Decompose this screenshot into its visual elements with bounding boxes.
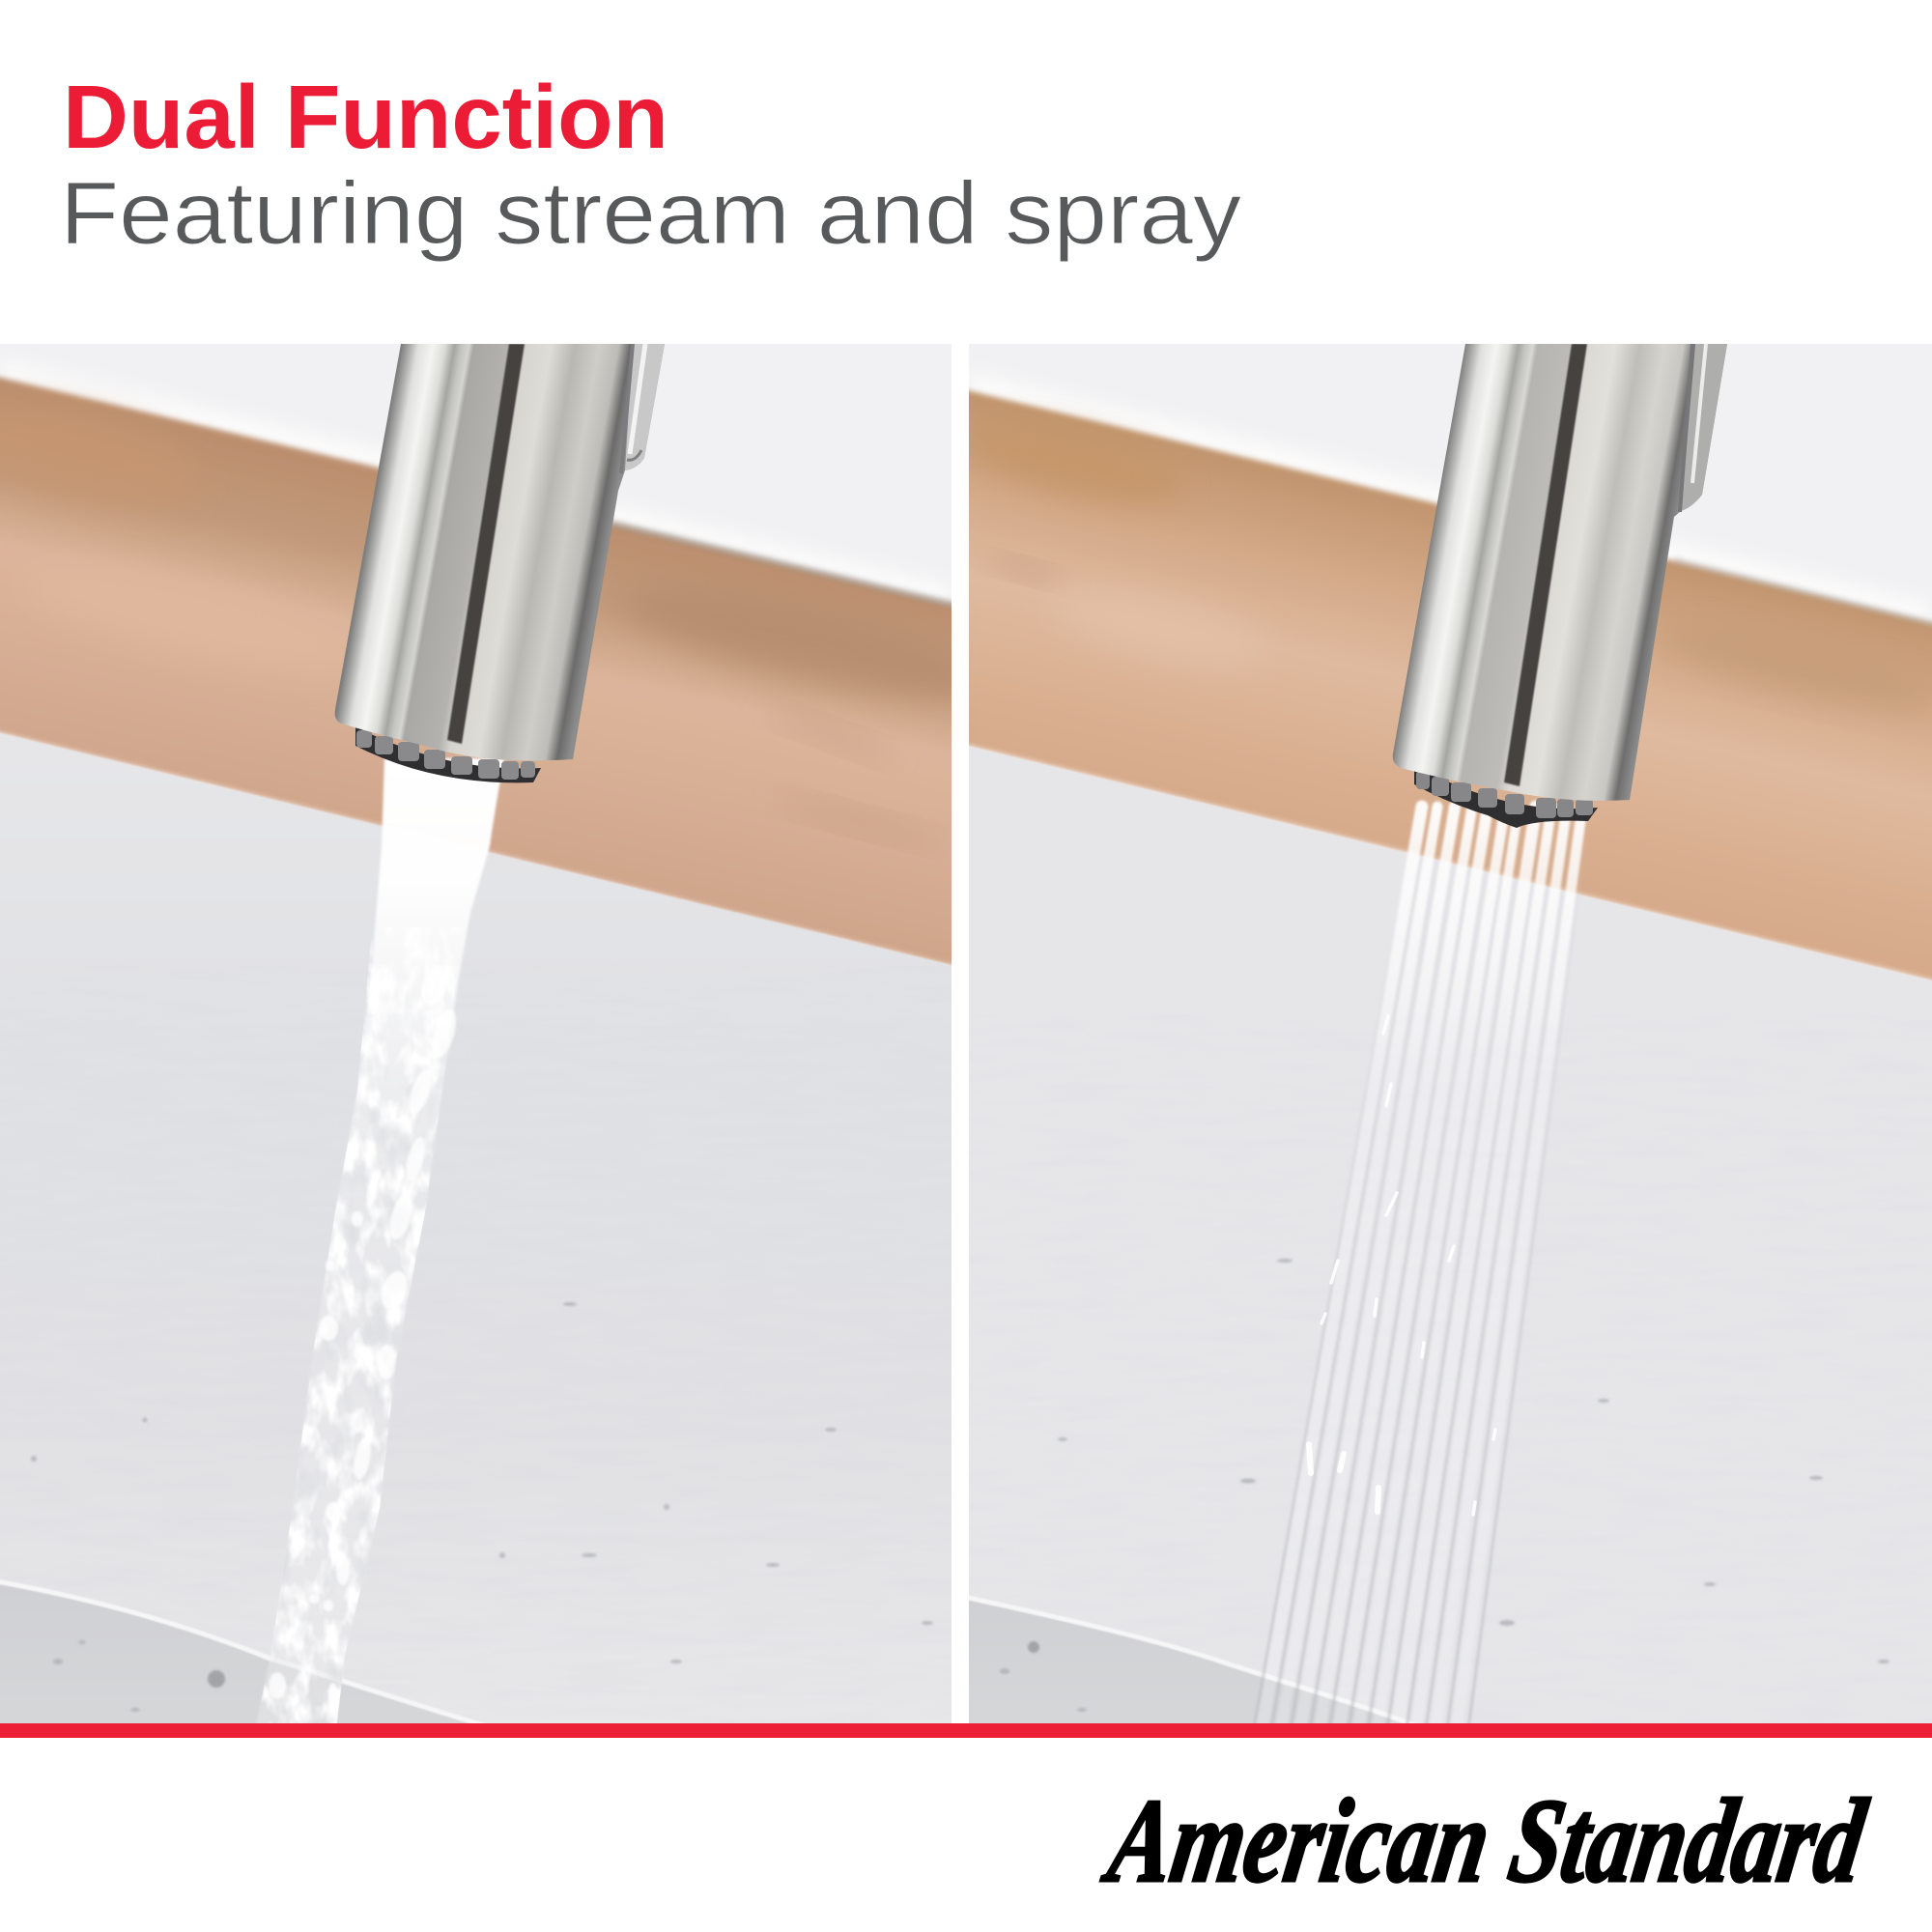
panel: spray photo (952, 344, 1932, 1739)
stream of water (255, 758, 504, 1729)
water texture: foam (261, 942, 452, 1723)
wood countertop band (952, 386, 1932, 985)
counter front lip (0, 1580, 502, 1731)
water texture: shadows (271, 1048, 431, 1723)
sprayer toggle (621, 344, 665, 473)
dark reflection stripe (447, 344, 525, 744)
counter speckles (1000, 1259, 1889, 1712)
faucet spray head (335, 344, 665, 782)
faucet body (1393, 344, 1727, 801)
counter front lip (959, 1596, 1430, 1731)
stream highlights (1262, 807, 1582, 1729)
spray streams (1254, 807, 1590, 1729)
white quartz counter (952, 742, 1932, 1739)
subtitle: Featuring stream and spray: Featuring stream and spray (60, 164, 1241, 263)
red divider bar (0, 1723, 1932, 1738)
nozzle teeth (1416, 771, 1593, 818)
title: Dual Function: Dual Function (63, 67, 668, 167)
wood countertop band (0, 373, 989, 971)
stream shadows (1254, 807, 1590, 1729)
panel: stream photo (0, 344, 989, 1739)
counter speckles (31, 1302, 933, 1712)
faucet spray head (1393, 344, 1727, 828)
faucet body (335, 344, 665, 760)
dark reflection stripe (1504, 344, 1587, 786)
white quartz counter (0, 728, 971, 1739)
nozzle teeth (356, 730, 535, 780)
sprayer toggle (1680, 344, 1727, 512)
wall (969, 344, 1932, 653)
water highlights (269, 961, 461, 1718)
water glints (1309, 1016, 1495, 1515)
wall (0, 344, 952, 597)
